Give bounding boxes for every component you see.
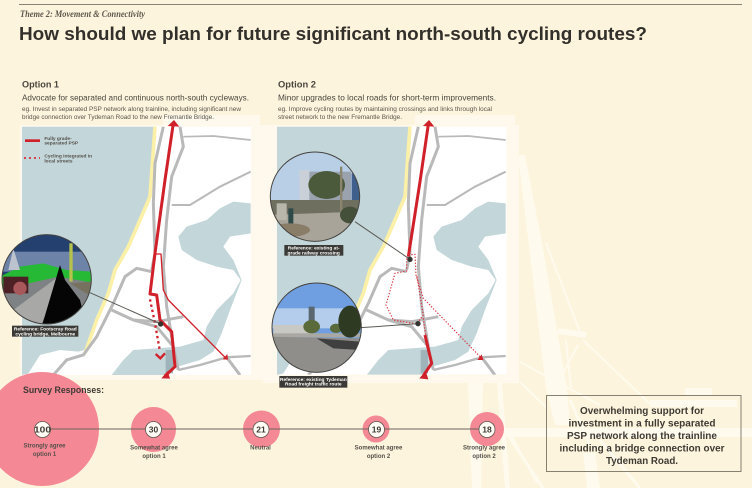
survey bubble chart: Somewhat agree	[355, 446, 403, 452]
photo caption: grade railway crossing	[288, 250, 340, 256]
callout: including a bridge connection over	[560, 444, 725, 454]
photo caption: Road freight traffic route	[285, 382, 342, 388]
survey bubble chart: Strongly agree	[23, 444, 66, 450]
legend: Fully grade-	[44, 136, 72, 142]
option 1 text block: Advocate for separated and continuous north-south cycleways.	[22, 92, 249, 102]
survey bubble chart: option 2	[367, 454, 391, 460]
photo caption: Reference: existing at-	[288, 246, 340, 252]
map: option 2	[267, 120, 507, 388]
survey bubble chart: option 1	[33, 452, 57, 458]
option 1 text block	[22, 80, 249, 121]
route: fully separated PSP	[150, 120, 228, 379]
survey bubble chart	[0, 372, 506, 486]
callout: Tydeman Road.	[606, 456, 678, 467]
option 2 text block: Option 2	[278, 80, 316, 90]
leader lines	[355, 222, 418, 328]
survey heading: Survey Responses:	[23, 385, 104, 396]
route: integrated local streets	[386, 254, 480, 357]
photo caption	[279, 376, 347, 388]
route: integrated local streets	[150, 299, 165, 358]
photo caption: cycling bridge, Melbourne	[15, 331, 76, 337]
map: option 1	[0, 120, 251, 379]
callout: investment in a fully separated	[568, 418, 716, 430]
callout	[546, 396, 741, 472]
thin rule	[19, 4, 742, 6]
survey bubble chart: option 1	[142, 454, 166, 460]
survey bubble chart: Somewhat agree	[130, 446, 179, 452]
callout: PSP network along the trainline	[567, 431, 718, 442]
title: How should we plan for future significant north-south cycling routes?	[19, 24, 647, 44]
photo caption	[12, 326, 78, 337]
survey bubble chart: 19	[372, 424, 381, 434]
option 1 text block: Option 1	[22, 80, 59, 90]
legend	[24, 136, 92, 164]
survey bubble chart: option 2	[472, 454, 496, 460]
survey bubble chart: 100	[34, 424, 51, 434]
callout: Overwhelming support for	[580, 406, 704, 417]
option 1 text block: bridge connection over Tydeman Road to the new Fremantle Bridge.	[22, 114, 214, 121]
survey bubble chart: 30	[149, 424, 158, 434]
survey bubble chart: Neutral	[250, 446, 271, 452]
theme label: Theme 2: Movement & Connectivity	[20, 9, 146, 19]
route: fully separated PSP	[408, 120, 483, 379]
photo: Tydeman Road	[270, 282, 363, 375]
option 2 text block: street network to the new Fremantle Bridge.	[278, 114, 402, 121]
background crane silhouette	[468, 155, 752, 488]
photo: at-grade railway crossing	[267, 150, 363, 243]
photo caption: Reference: Footscray Road	[14, 327, 77, 333]
option 2 text block	[278, 80, 496, 121]
survey bubble chart: Strongly agree	[463, 446, 506, 452]
legend: local streets	[44, 158, 73, 164]
legend: separated PSP	[44, 141, 79, 147]
photo caption	[284, 245, 343, 256]
map panel halo: option 1	[20, 115, 263, 380]
map panel halo: option 2	[263, 115, 519, 383]
option 2 text block: Minor upgrades to local roads for short-term improvements.	[278, 92, 496, 102]
photo caption: Reference: existing Tydeman	[280, 377, 347, 383]
legend: Cycling integrated in	[44, 154, 92, 160]
photo: Footscray Road cycling bridge	[0, 233, 93, 327]
survey bubble chart: 18	[482, 424, 492, 434]
leader line	[90, 293, 161, 324]
survey bubble chart: 21	[256, 424, 266, 434]
option 2 text block: eg. Improve cycling routes by maintaining crossings and links through local	[278, 106, 492, 113]
option 1 text block: eg. Invest in separated PSP network along trainline, including significant new	[22, 106, 241, 113]
